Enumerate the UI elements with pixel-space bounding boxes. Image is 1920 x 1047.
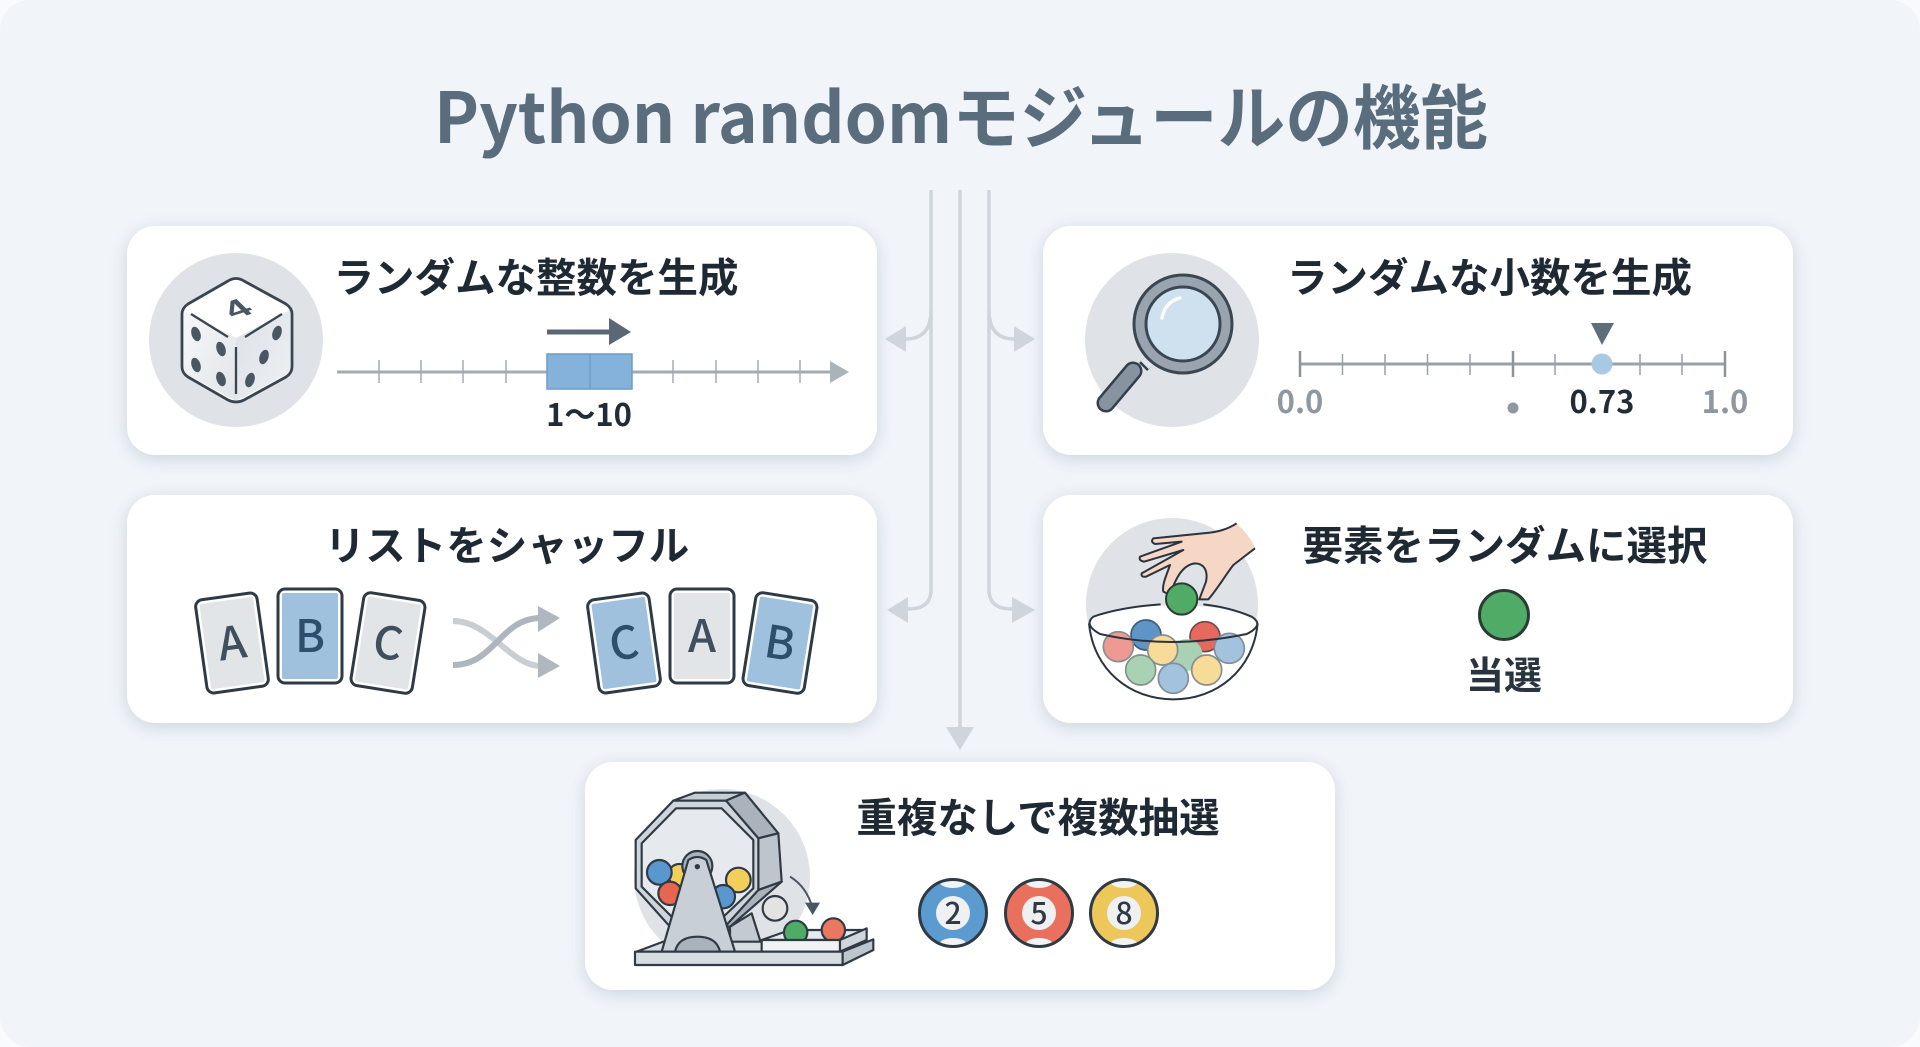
heading: リストをシャッフル bbox=[325, 513, 689, 572]
cards after shuffle: B bbox=[761, 605, 800, 674]
panel: random choice bbox=[1043, 495, 1793, 723]
heading: 重複なしで複数抽選 bbox=[856, 785, 1220, 844]
icon: shuffle arrow bbox=[453, 606, 560, 678]
number scale: 0.0 bbox=[1277, 377, 1323, 422]
panel: random float bbox=[1043, 226, 1793, 455]
icon: magnifying glass bbox=[1085, 253, 1259, 427]
numbered balls bbox=[920, 874, 1158, 952]
cards before shuffle: A bbox=[213, 605, 250, 674]
winning ball bbox=[1480, 590, 1528, 640]
panel: sample without duplicates bbox=[585, 762, 1335, 990]
cards before shuffle: C bbox=[369, 605, 408, 674]
cards after shuffle: A bbox=[688, 600, 716, 665]
arrows: left side bbox=[885, 190, 931, 623]
infographic canvas bbox=[107, 83, 1813, 1014]
ball 2 bbox=[920, 874, 986, 952]
panel: shuffle list bbox=[127, 495, 877, 723]
arrow: centre to bottom card bbox=[946, 190, 974, 750]
icon: dice: 4 bbox=[214, 293, 260, 324]
cards before shuffle bbox=[195, 589, 426, 694]
number scale: 1.0 bbox=[1702, 377, 1748, 422]
ball 5: 5 bbox=[1030, 889, 1048, 933]
icon: hand picking a ball from bowl bbox=[1086, 518, 1258, 699]
number scale bbox=[1277, 323, 1748, 422]
heading: ランダムな小数を生成 bbox=[1287, 245, 1692, 304]
heading: ランダムな整数を生成 bbox=[334, 245, 738, 304]
label: winner: 当選 bbox=[1466, 645, 1542, 700]
heading: 要素をランダムに選択 bbox=[1302, 513, 1708, 572]
icon: lottery machine bbox=[634, 789, 873, 965]
flow arrows bbox=[885, 190, 1035, 750]
cards after shuffle: C bbox=[605, 605, 642, 674]
cards after shuffle bbox=[587, 589, 818, 694]
ball 8 bbox=[1090, 874, 1158, 952]
icon: dice bbox=[149, 253, 323, 427]
number line bbox=[337, 318, 849, 435]
number scale: 0.73 bbox=[1570, 377, 1634, 422]
title: Python randomモジュールの機能 bbox=[434, 63, 1488, 164]
cards before shuffle: B bbox=[295, 600, 325, 665]
ball 2: 2 bbox=[944, 889, 962, 933]
arrows: right side bbox=[989, 190, 1035, 623]
ball 8: 8 bbox=[1115, 889, 1133, 933]
ball 5 bbox=[1006, 874, 1072, 952]
number line: 1〜10 bbox=[546, 390, 632, 435]
panel: random integer bbox=[127, 226, 877, 455]
